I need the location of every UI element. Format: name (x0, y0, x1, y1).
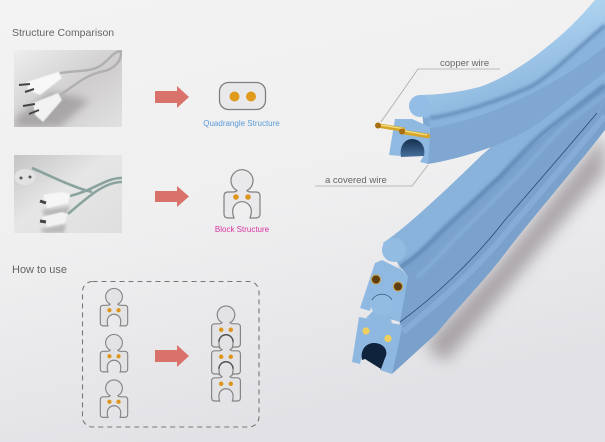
cable: upper section (375, 0, 605, 164)
copper wires (375, 122, 428, 136)
cable shadow (425, 132, 605, 362)
neck and head of lower section (366, 292, 394, 325)
lower notch (362, 343, 386, 369)
stacked blocks (212, 306, 240, 401)
cable: lower section (352, 100, 605, 374)
label: copper wire: copper wire (440, 58, 489, 69)
gap line (400, 113, 597, 322)
label: Quadrangle Structure: Quadrangle Structure (203, 119, 280, 128)
photo: block power cords (14, 155, 122, 233)
icon: quadrangle structure (220, 82, 266, 110)
middle front face (360, 260, 408, 322)
arrow 1 (155, 86, 189, 108)
photo: quadrangle power cords (14, 50, 122, 127)
icon: block structure (224, 170, 260, 218)
upper notch (401, 139, 424, 157)
upper front face (389, 119, 430, 164)
arrow 3 (155, 345, 189, 367)
label: a covered wire: a covered wire (325, 175, 387, 186)
label: a covered wire (315, 165, 428, 186)
middle contacts (372, 275, 402, 291)
label: Block Structure: Block Structure (215, 225, 270, 234)
lower front face (352, 317, 402, 374)
separate block 1 (100, 288, 128, 326)
cable: middle section (360, 55, 605, 325)
heading: Structure Comparison: Structure Comparison (12, 27, 114, 39)
arrow 2 (155, 186, 189, 207)
label: copper wire (381, 58, 500, 122)
heading: How to use: How to use (12, 264, 67, 276)
middle head (382, 238, 406, 262)
lower gold contacts (362, 327, 392, 342)
panel: how to use (82, 282, 259, 427)
separate block 3 (100, 380, 128, 417)
separate block 2 (100, 334, 128, 372)
upper head (409, 95, 431, 117)
